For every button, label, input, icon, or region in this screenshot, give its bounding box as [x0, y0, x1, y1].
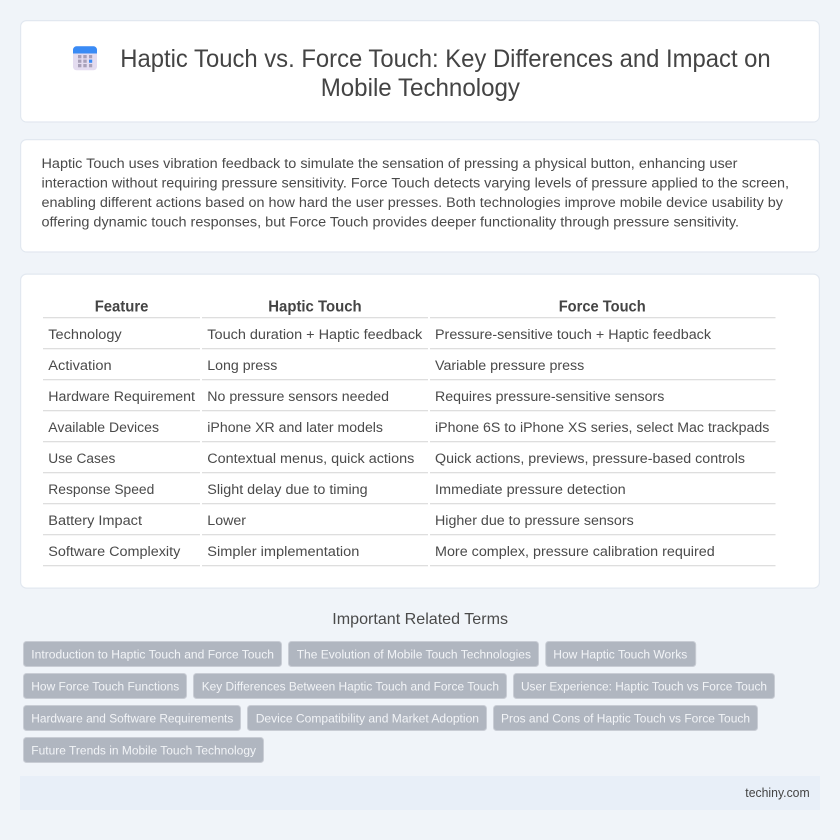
tag: future trends: Future Trends in Mobile Touch Technology [31, 743, 257, 757]
tag: key differences: Key Differences Between Haptic Touch and Force Touch [202, 679, 499, 693]
tag: evolution: The Evolution of Mobile Touch Technologies [297, 647, 531, 661]
table row: response speed: Response Speed [48, 482, 154, 498]
table row: software complexity [43, 544, 776, 566]
table row: available devices: iPhone XR and later models [207, 420, 383, 436]
icon: calendar [73, 46, 97, 70]
table row: technology [43, 327, 776, 349]
title: Haptic Touch vs. Force Touch: Key Differences and Impact on [120, 45, 771, 73]
table row: available devices: iPhone 6S to iPhone XS series, select Mac trackpads [435, 420, 769, 436]
tag: device compatibility: Device Compatibility and Market Adoption [256, 711, 479, 725]
table row: activation: Variable pressure press [435, 358, 584, 374]
table header row [43, 299, 776, 318]
tag: pros and cons: Pros and Cons of Haptic Touch vs Force Touch [501, 711, 750, 725]
table row: available devices: Available Devices [48, 420, 159, 436]
text block: summary paragraph: Haptic Touch uses vibration feedback to simulate the sensation of pressing a physical button, enhancing user [42, 156, 738, 172]
tag: pros and cons [494, 706, 758, 730]
table row: hardware requirement: No pressure sensors needed [207, 389, 389, 405]
table row: response speed: Slight delay due to timing [207, 482, 368, 498]
table row: technology: Technology [48, 327, 123, 343]
tag: user experience: User Experience: Haptic Touch vs Force Touch [521, 679, 767, 693]
tag: hardware and software [24, 706, 240, 730]
table row: hardware requirement: Hardware Requirement [48, 389, 195, 405]
text block: summary paragraph: offering dynamic touch responses, but Force Touch provides deeper functionality through pressure sensitivity. [42, 214, 739, 230]
table row: response speed [43, 482, 776, 504]
text block: summary paragraph: interaction without requiring pressure sensitivity. Force Touch detects varying levels of pressure applied to the screen, [42, 176, 789, 192]
table row: use cases: Quick actions, previews, pressure-based controls [435, 451, 745, 467]
footer [20, 776, 820, 810]
text block: summary paragraph: enabling different actions based on how hard the user presses. Both technologies improve mobile device usability by [42, 195, 784, 211]
table row: software complexity: Simpler implementation [207, 544, 359, 560]
table row: activation: Long press [207, 358, 277, 374]
table row: technology: Pressure-sensitive touch + Haptic feedback [435, 327, 712, 343]
table row: use cases: Use Cases [48, 451, 115, 467]
table header row: Force Touch [559, 299, 646, 316]
tag: how haptic touch works: How Haptic Touch Works [553, 647, 687, 661]
table row: technology: Touch duration + Haptic feedback [207, 327, 423, 343]
panel: header [21, 21, 819, 122]
tag: key differences [194, 674, 506, 698]
tag: hardware and software: Hardware and Software Requirements [31, 711, 233, 725]
title [120, 45, 771, 102]
table row: activation: Activation [48, 358, 112, 374]
table row: response speed: Immediate pressure detection [435, 482, 626, 498]
table row: battery impact: Lower [207, 513, 246, 529]
related terms tags [24, 642, 774, 762]
table row: hardware requirement: Requires pressure-sensitive sensors [435, 389, 664, 405]
table row: battery impact: Battery Impact [48, 513, 142, 529]
tag: how force touch functions: How Force Touch Functions [31, 679, 179, 693]
table row: activation [43, 358, 776, 380]
table row: use cases [43, 451, 776, 473]
table row: battery impact [43, 513, 776, 535]
tag: introduction [24, 642, 282, 666]
table row: available devices [43, 420, 776, 442]
panel: comparison table [21, 274, 819, 588]
tag: how force touch functions [24, 674, 186, 698]
table row: hardware requirement [43, 389, 776, 411]
tag: future trends [24, 738, 264, 762]
table header row: Haptic Touch [268, 299, 362, 316]
table row: software complexity: Software Complexity [48, 544, 181, 560]
tag: how haptic touch works [546, 642, 696, 666]
heading: important related terms: Important Related Terms [332, 611, 508, 628]
tag: device compatibility [248, 706, 486, 730]
tag: evolution [288, 642, 538, 666]
table header row: Feature [95, 299, 148, 316]
tag: introduction: Introduction to Haptic Touch and Force Touch [31, 647, 274, 661]
footer source text: techiny.com [745, 785, 810, 800]
text block: summary paragraph [42, 156, 789, 230]
title: Mobile Technology [321, 74, 520, 102]
table row: software complexity: More complex, pressure calibration required [435, 544, 715, 560]
table row: use cases: Contextual menus, quick actions [207, 451, 414, 467]
panel: introduction [21, 140, 819, 252]
tag: user experience [514, 674, 774, 698]
table row: battery impact: Higher due to pressure sensors [435, 513, 634, 529]
